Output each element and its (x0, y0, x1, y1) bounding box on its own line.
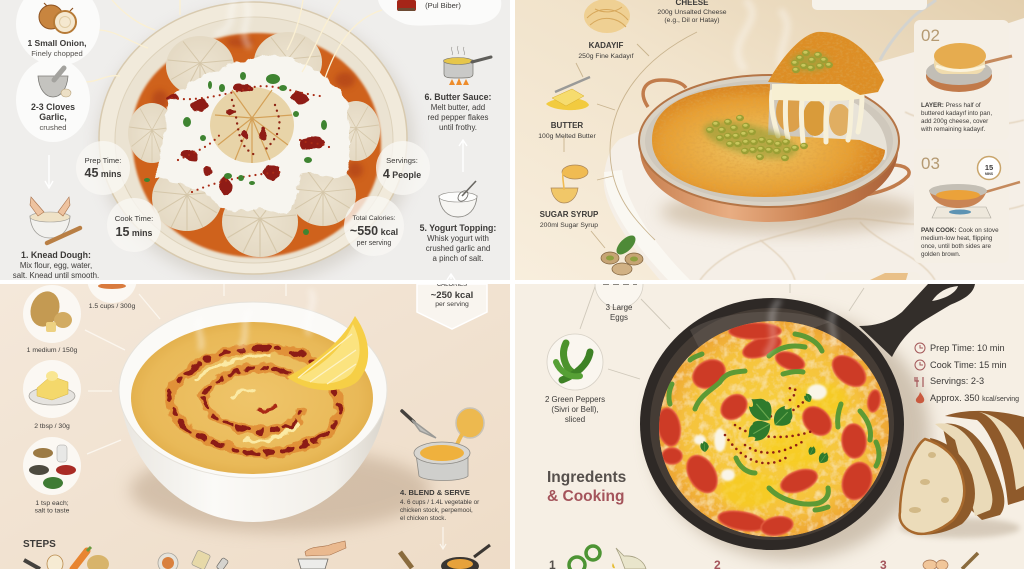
lemon wedge (287, 316, 368, 390)
badge: calories: ~550 kcal (350, 224, 398, 238)
chili flakes (725, 388, 815, 463)
badge: prep time: Prep Time: (85, 156, 121, 165)
icon: potato bubble (23, 285, 81, 343)
green pepper strips (669, 334, 879, 510)
ingredient bubbles (16, 0, 501, 142)
text: garlic: 2-3 Cloves (31, 102, 75, 112)
middle slice crust (942, 423, 1004, 520)
sliced bread (900, 411, 1024, 538)
badge: prep time: 45 mins (85, 166, 122, 180)
icon: saucepan on flame (444, 46, 491, 85)
icon: whisk and yogurt bowl (439, 181, 477, 217)
steam (215, 0, 250, 48)
icon: syrup pitcher and bowl (551, 165, 588, 203)
badge: calories: per serving (357, 240, 391, 247)
marble countertop (604, 18, 1024, 280)
pan shadow (660, 190, 920, 234)
icon: 15 minute timer (978, 156, 1000, 180)
copper pan body (639, 75, 899, 222)
steam (199, 290, 313, 350)
icon: eggs bubble (595, 260, 643, 308)
text: step 4 blend and serve: el chicken stock. (400, 515, 446, 522)
arrow: up to yogurt topping (447, 274, 455, 280)
kunefe with slice removed (652, 84, 885, 197)
text: spice amount: salt to taste (35, 508, 70, 514)
parsley garnish (700, 392, 831, 466)
steam (738, 0, 787, 75)
icon: onions (39, 3, 76, 33)
pistachios on slice (791, 50, 833, 73)
text: step 6 butter sauce: until frothy. (439, 123, 477, 132)
lifted slice (768, 32, 884, 95)
text: cheese: (e.g., Dil or Hatay) (664, 17, 720, 24)
icon: pan on burner (929, 182, 1020, 218)
icon: butter and knife (546, 77, 590, 110)
text: butter amount: 2 tbsp / 30g (34, 423, 70, 430)
middle slice (935, 423, 992, 516)
info list: times, servings, calories: Servings: 2-3 (930, 376, 984, 386)
skillet shadow (650, 310, 930, 560)
red butter sauce (132, 33, 381, 257)
arrow: down to pan (440, 527, 446, 549)
icon: 15 minute timer: 15 (985, 163, 993, 172)
chili butter flecks (172, 86, 330, 192)
card: step 03 pan cook: PAN COOK: Cook on stove (921, 227, 999, 234)
badge: servings: 4 People (383, 167, 421, 181)
swirl of chili butter (170, 348, 340, 454)
lentil soup surface (131, 322, 373, 474)
card: step 03 pan cook: golden brown. (921, 251, 961, 258)
text: pul biber: (Pul Biber) (425, 1, 461, 10)
card: step 02 layer: LAYER: Press half of (921, 102, 981, 109)
card: bottom step (825, 272, 920, 286)
info list: times, servings, calories: Cook Time: 15 min (930, 360, 1007, 370)
text: eggs: 3 Large (606, 303, 633, 312)
text: step 6 butter sauce: 6. Butter Sauce: (425, 92, 492, 102)
icon: knife and tomato slices (923, 553, 978, 569)
card: step 02 layer: 02 (921, 26, 940, 45)
icon: lentil bubble (87, 253, 137, 303)
text: step 4 blend and serve: chicken stock, perpemooi, (400, 507, 473, 514)
cast iron skillet (640, 298, 904, 550)
text: step 5 yogurt topping: 5. Yogurt Topping: (420, 223, 496, 233)
text: potato amount: 1 medium / 150g (27, 347, 78, 354)
text: green peppers: (Sivri or Bell), (551, 405, 599, 414)
arrow: down to knead dough (45, 155, 53, 188)
manti dumplings (128, 32, 380, 257)
text: butter: 100g Melted Butter (538, 133, 596, 140)
badge: calories pentagon (417, 282, 487, 329)
badge: prep time (84, 141, 130, 195)
badge: calories pentagon: ~250 kcal (431, 290, 473, 301)
heading: ingredients and cooking: Ingredents (547, 469, 626, 486)
front slice crust (920, 438, 975, 535)
icon: layered kadayif in pan (926, 43, 1012, 92)
badge: cook time: Cook Time: (115, 214, 153, 223)
icon: kneading hands and bowl (30, 197, 80, 243)
text: garlic: crushed (39, 123, 67, 132)
card: step 02 layer (914, 20, 1012, 140)
spatula (880, 0, 936, 60)
badge: calories pentagon: per serving (435, 301, 469, 308)
menemen food (655, 321, 889, 538)
text: spice amount: 1 tsp each; (35, 500, 69, 507)
icon: green peppers bubble (547, 334, 603, 390)
text: step 4 blend and serve: 4. 6 cups / 1.4L vegetable or (400, 499, 479, 506)
card: step 03 pan cook: medium-low heat, flipping (921, 235, 993, 242)
icon: mortar with garlic (38, 68, 71, 97)
text: green peppers: 2 Green Peppers (545, 395, 605, 404)
text: kadayif: KADAYIF (589, 41, 624, 50)
bubble: onion (16, 0, 100, 66)
step numbers row (549, 558, 887, 569)
pistachios on kunefe (706, 115, 808, 161)
text: step 5 yogurt topping: crushed garlic and (426, 244, 490, 253)
heading: steps: STEPS (23, 539, 56, 550)
panel: manti recipe (0, 0, 510, 283)
text: step 5 yogurt topping: a pinch of salt. (433, 254, 483, 263)
badge: cook time: 15 mins (116, 225, 153, 239)
text: eggs: Eggs (610, 313, 628, 322)
text: onion: 1 Small Onion, (27, 38, 87, 48)
connector arc and lines (564, 32, 697, 248)
card: step 02 layer: with remaining kadayıf. (920, 126, 986, 133)
icon: butter bubble (23, 360, 81, 418)
centre dumpling (210, 87, 294, 163)
connector lines (580, 284, 864, 379)
card: step 03 pan cook: 03 (921, 154, 940, 173)
stretched cheese strands (772, 84, 866, 142)
text: cheese: 200g Unsalted Cheese (657, 9, 727, 16)
runny yolk centres (720, 382, 848, 508)
info list: times, servings, calories (915, 343, 1019, 403)
bread crumb holes (909, 452, 949, 513)
arrow: up to butter sauce (459, 140, 467, 172)
panel: lentil soup recipe (0, 253, 510, 569)
text: sugar syrup: 200ml Sugar Syrup (540, 222, 598, 229)
card: step 03 pan cook (914, 149, 1020, 263)
text: step 1 knead dough: 1. Knead Dough: (21, 250, 91, 260)
connector lines to ingredients (85, 0, 382, 82)
icon: 15 minute timer: MINS (985, 172, 993, 176)
back loaf crust (945, 411, 1024, 505)
text: step 4 blend and serve: 4. BLEND & SERVE (400, 488, 470, 497)
connector arrows (85, 284, 286, 454)
bubble: pul biber (378, 0, 501, 26)
icons: steps row jars (158, 550, 229, 569)
text: step 6 butter sauce: Melt butter, add (431, 103, 485, 112)
steam (765, 300, 835, 355)
pistachio underlay (700, 53, 830, 166)
icons: steps row vegetables (24, 547, 109, 569)
ceramic plate with rim (99, 2, 407, 274)
bowl shadow (130, 448, 430, 532)
icon: chili jar (397, 0, 416, 11)
panel: menemen recipe (515, 260, 1024, 569)
badge: servings (376, 141, 430, 195)
badge: servings: Servings: (386, 156, 418, 165)
white soup bowl (119, 302, 387, 522)
badge: calories (344, 196, 404, 256)
chili butter clusters (166, 83, 324, 197)
icon: steps row pan (400, 545, 490, 569)
plate shadow (98, 7, 414, 283)
badge: calories: Total Calories: (352, 215, 396, 222)
icon: steps row blender (298, 541, 346, 569)
text: step 1 knead dough: salt. Knead until smooth. (13, 271, 99, 280)
text: lentil amount: 1.5 cups / 300g (89, 303, 135, 310)
icon: spices bubble (23, 437, 81, 495)
icon: pistachios (601, 232, 643, 275)
text: butter: BUTTER (551, 121, 583, 130)
card: step 02 layer: buttered kadayıf into pan, (921, 110, 992, 117)
back slice (979, 412, 1024, 490)
text: step 5 yogurt topping: Whisk yogurt with (427, 234, 489, 243)
front slice (900, 439, 964, 534)
badge: cook time (107, 198, 161, 252)
heading: ingredients and cooking: & Cooking (547, 488, 624, 505)
badge: calories pentagon: CALORIES (437, 282, 467, 288)
parsley garnish (144, 72, 327, 235)
tomato slices (655, 323, 882, 538)
text: green peppers: sliced (565, 415, 585, 424)
icon: knife, pitcher and pot (402, 408, 484, 480)
heading: ingredients and cooking (547, 469, 626, 505)
info list: times, servings, calories: Prep Time: 10 min (930, 343, 1005, 353)
yogurt topping (155, 55, 350, 215)
panel: kunefe recipe (515, 0, 1024, 286)
darker sauce pools (152, 37, 363, 178)
icon: kadayif nest (584, 0, 630, 33)
info list: times, servings, calories: Approx. 350 kcal/serving (930, 393, 1019, 403)
bubble: garlic (16, 58, 90, 142)
text: sugar syrup: SUGAR SYRUP (540, 210, 599, 219)
egg whites (694, 384, 827, 481)
card: step top (812, 0, 927, 10)
icon: pepper rings and oil bottle (569, 546, 646, 569)
cast iron handle (859, 284, 975, 357)
copper handles (643, 80, 909, 198)
text: kadayif: 250g Fine Kadayıf (578, 53, 634, 60)
text: step 6 butter sauce: red pepper flakes (428, 113, 489, 122)
text: onion: Finely chopped (31, 49, 83, 58)
card: step 03 pan cook: once, until both sides are (921, 243, 992, 250)
card: step 02 layer: add 200g cheese, cover (921, 118, 988, 125)
text: step 1 knead dough: Mix flour, egg, water, (20, 261, 92, 270)
text: garlic: Garlic, (39, 112, 67, 122)
